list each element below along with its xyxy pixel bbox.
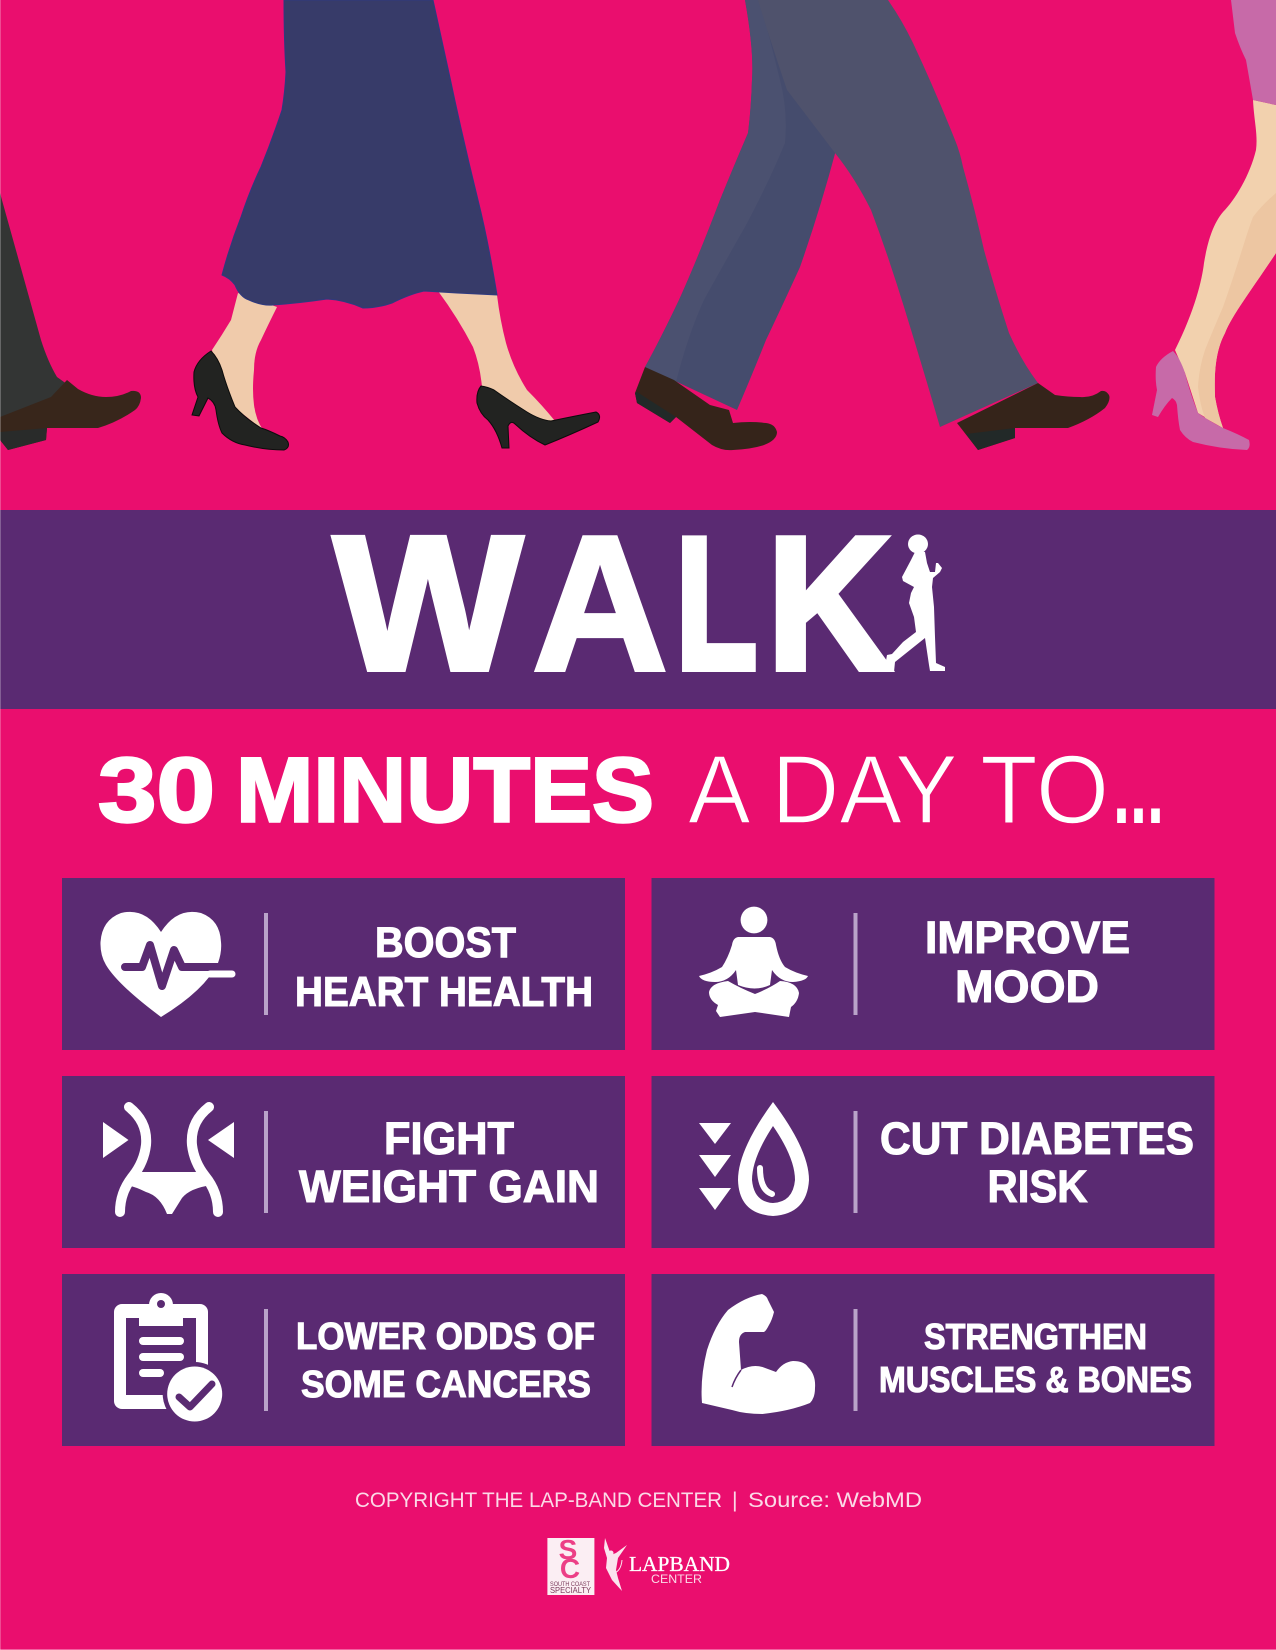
panel: boost heart health: [62, 878, 625, 1050]
text: strengthen muscles and bones: [879, 1316, 1192, 1400]
title: WALK: K: [767, 498, 891, 710]
panel: fight weight gain: [62, 1076, 625, 1248]
text: improve mood: [925, 912, 1130, 1012]
text: strengthen muscles and bones: STRENGTHEN: [924, 1316, 1147, 1357]
panel: cut diabetes risk: [652, 1076, 1214, 1248]
panel: lower odds of some cancers: [62, 1274, 625, 1446]
logo: lapband center: [604, 1538, 730, 1591]
text: cut diabetes risk: RISK: [988, 1161, 1088, 1212]
logo: south coast specialty: SOUTH COAST: [550, 1582, 590, 1588]
title: WALK: W: [334, 496, 523, 710]
text: fight weight gain: [299, 1113, 599, 1212]
figure: left man leg and shoe: [0, 193, 141, 450]
icon: meditating person: [699, 907, 808, 1017]
heading: 30 minutes a day to: ...: [1113, 735, 1164, 844]
text: fight weight gain: FIGHT: [384, 1113, 514, 1164]
icon: waist with arrows: [103, 1107, 234, 1214]
text: lower odds of some cancers: SOME CANCERS: [301, 1364, 591, 1406]
figure: woman in navy skirt: [192, 0, 600, 450]
icon: blood drop with down arrows: [699, 1102, 809, 1216]
heading: 30 minutes a day to: 30: [98, 740, 215, 842]
text: lower odds of some cancers: [296, 1316, 595, 1406]
panel: walking legs illustration: [0, 0, 1276, 450]
logo: south coast specialty: [547, 1534, 594, 1595]
footer copyright text: |: [732, 1488, 738, 1512]
text: lower odds of some cancers: LOWER ODDS OF: [296, 1316, 595, 1358]
logo: south coast specialty: SPECIALTY: [550, 1586, 592, 1595]
text: cut diabetes risk: [880, 1113, 1194, 1212]
footer copyright text: COPYRIGHT THE LAP-BAND CENTER: [355, 1488, 722, 1512]
text: boost heart health: BOOST: [375, 919, 516, 967]
panel: improve mood: [652, 878, 1214, 1050]
icon: clipboard with check: [114, 1293, 227, 1426]
text: improve mood: IMPROVE: [925, 912, 1130, 963]
logo: lapband center: CENTER: [651, 1572, 702, 1586]
logo: south coast specialty: C: [560, 1553, 580, 1584]
title: WALK: A: [532, 495, 668, 711]
figure: woman in mauve skirt: [1152, 0, 1276, 450]
text: boost heart health: [295, 919, 593, 1015]
heading: 30 minutes a day to: MINUTES: [236, 740, 654, 842]
panel: strengthen muscles and bones: [652, 1274, 1214, 1446]
text: cut diabetes risk: CUT DIABETES: [880, 1113, 1194, 1164]
panel: title band: [0, 510, 1276, 709]
title: WALK: L: [676, 499, 757, 708]
text: strengthen muscles and bones: MUSCLES & BONES: [879, 1359, 1192, 1400]
icon: walking woman silhouette: [884, 534, 945, 672]
text: boost heart health: HEART HEALTH: [295, 968, 593, 1015]
footer copyright text: Source: WebMD: [748, 1488, 922, 1512]
text: fight weight gain: WEIGHT GAIN: [299, 1161, 599, 1212]
icon: heart with pulse: [100, 912, 232, 1017]
figure: man in grey trousers: [635, 0, 1110, 450]
text: improve mood: MOOD: [955, 961, 1099, 1012]
icon: flexed bicep: [702, 1294, 815, 1414]
logo: lapband center: LAPBAND: [629, 1552, 730, 1576]
logo: south coast specialty: S: [559, 1534, 577, 1565]
heading: 30 minutes a day to: A DAY TO: [688, 735, 1109, 844]
